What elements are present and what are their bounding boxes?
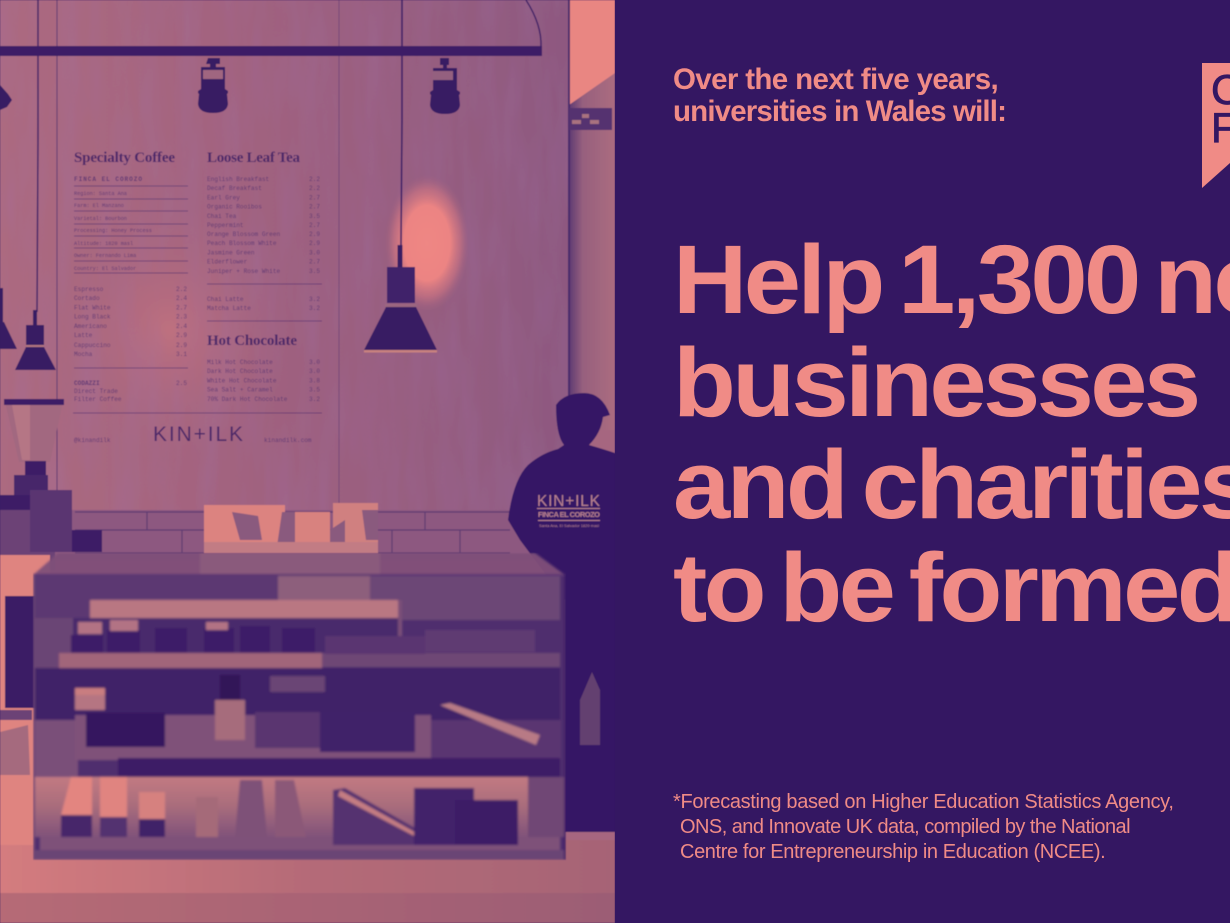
menu board text: Cappuccino xyxy=(74,342,111,349)
menu board text: 2.9 xyxy=(309,240,320,247)
menu board text: 3.8 xyxy=(309,378,320,384)
main headline xyxy=(673,225,1230,642)
menu board text: 3.0 xyxy=(309,250,320,256)
menu board text: 2.7 xyxy=(309,222,320,229)
barista with branded t-shirt: KIN+ILK xyxy=(537,493,601,510)
menu board text: Cortado xyxy=(74,295,100,302)
menu board text: Decaf Breakfast xyxy=(207,185,262,192)
menu board text: 2.2 xyxy=(309,185,320,192)
menu board text: Juniper + Rose White xyxy=(207,268,280,275)
menu board text: Peach Blossom White xyxy=(207,240,277,247)
menu board text: Chai Latte xyxy=(207,296,244,303)
menu board text: Flat White xyxy=(74,304,111,312)
barista with branded t-shirt: Santa Ana, El Salvador 1820 masl xyxy=(539,523,599,528)
coffee bags xyxy=(204,503,378,553)
logo: ribbon badge cropped at right edge xyxy=(1202,63,1230,188)
menu board text: 70% Dark Hot Chocolate xyxy=(207,396,288,403)
menu board text: KIN+ILK xyxy=(153,423,243,446)
menu board text: Altitude: 1820 masl xyxy=(74,241,133,247)
menu board text: 3.1 xyxy=(176,351,187,358)
loaves on bottom shelf xyxy=(61,777,518,845)
counter top xyxy=(0,555,615,923)
menu board text: Long Black xyxy=(74,314,111,320)
menu board text: Latte xyxy=(74,332,93,339)
menu board text: 3.2 xyxy=(309,305,320,312)
menu board text: Specialty Coffee xyxy=(74,150,175,166)
intro heading: Over the next five years, xyxy=(673,63,998,96)
menu board text: Owner: Fernando Lima xyxy=(74,253,136,259)
menu board text: 2.7 xyxy=(309,194,320,202)
tiled wall xyxy=(0,490,569,570)
menu board text: 3.5 xyxy=(309,386,320,394)
menu board text: 3.5 xyxy=(309,268,320,275)
menu board text: Varietal: Bourbon xyxy=(74,216,127,222)
barista with branded t-shirt xyxy=(508,393,615,832)
menu board text: 2.7 xyxy=(176,304,187,312)
menu board text: White Hot Chocolate xyxy=(207,378,277,384)
pendant lamps xyxy=(0,245,437,370)
pastries on top shelf xyxy=(71,626,535,654)
menu board text: Loose Leaf Tea xyxy=(207,150,300,166)
footnote: Centre for Entrepreneurship in Education (NCEE). xyxy=(680,841,1105,863)
menu board text: 2.9 xyxy=(176,342,187,349)
track and cables xyxy=(0,0,542,312)
menu board text: 2.2 xyxy=(309,176,320,183)
background wall xyxy=(0,0,615,923)
menu board text: 2.9 xyxy=(176,332,187,339)
menu board text: Espresso xyxy=(74,286,104,293)
menu board text: 3.0 xyxy=(309,359,320,366)
wall socket xyxy=(569,108,612,130)
panel: statement on purple background xyxy=(615,0,1230,923)
menu board text: 2.4 xyxy=(176,295,187,302)
menu board text: English Breakfast xyxy=(207,176,270,183)
menu board text: CODAZZI xyxy=(74,380,100,387)
glass display cabinet xyxy=(33,553,566,860)
menu board text: Country: El Salvador xyxy=(74,266,136,272)
menu board text: Americano xyxy=(74,323,107,330)
menu board text: Farm: El Manzano xyxy=(74,203,124,209)
footnote: ONS, and Innovate UK data, compiled by the National xyxy=(680,816,1130,838)
barista with branded t-shirt: FINCA EL COROZO xyxy=(538,510,600,519)
footnote xyxy=(673,791,1174,863)
menu board text: Region: Santa Ana xyxy=(74,191,127,197)
menu board text: Milk Hot Chocolate xyxy=(207,359,273,366)
menu board text: Elderflower xyxy=(207,258,248,266)
menu board text: 3.2 xyxy=(309,396,320,403)
main headline: businesses xyxy=(673,328,1198,436)
menu board text xyxy=(73,150,322,446)
menu board text: Hot Chocolate xyxy=(207,333,297,349)
menu board text: 3.2 xyxy=(309,296,320,303)
panel: duotone cafe photo xyxy=(0,0,615,923)
menu board text: kinandilk.com xyxy=(264,437,312,444)
menu board text: 2.9 xyxy=(309,231,320,238)
menu board text: Processing: Honey Process xyxy=(74,228,152,234)
menu board text: 2.7 xyxy=(309,204,320,210)
menu board text: @kinandilk xyxy=(74,437,111,444)
intro heading xyxy=(673,63,1006,128)
menu board text: Mocha xyxy=(74,351,93,358)
menu board text: Jasmine Green xyxy=(207,250,255,256)
menu board text: Peppermint xyxy=(207,222,244,229)
menu board text: Matcha Latte xyxy=(207,305,251,312)
menu board text: Chai Tea xyxy=(207,213,237,220)
menu board text: 2.2 xyxy=(176,286,187,293)
menu board text: 3.0 xyxy=(309,368,320,375)
menu board text: 2.5 xyxy=(176,380,187,387)
menu board text: 2.3 xyxy=(176,314,187,320)
menu board text: 3.5 xyxy=(309,213,320,220)
menu board text: 2.7 xyxy=(309,258,320,266)
menu board text: Dark Hot Chocolate xyxy=(207,368,273,375)
menu board text: Earl Grey xyxy=(207,194,240,202)
menu board text: Filter Coffee xyxy=(74,396,122,403)
menu board text: Orange Blossom Green xyxy=(207,231,280,238)
coffee grinder xyxy=(0,399,64,520)
menu board text: Direct Trade xyxy=(74,388,118,395)
pastries on middle shelf xyxy=(75,675,540,752)
plywood menu board xyxy=(0,0,570,510)
intro heading: universities in Wales will: xyxy=(673,95,1006,128)
menu board text: Organic Rooibos xyxy=(207,204,262,210)
menu board text: Sea Salt + Caramel xyxy=(207,386,273,394)
footnote: *Forecasting based on Higher Education Statistics Agency, xyxy=(673,791,1174,813)
menu board text: 2.4 xyxy=(176,323,187,330)
menu board text: FINCA EL COROZO xyxy=(74,176,142,183)
cake slices, upper tops xyxy=(78,620,228,634)
spotlights xyxy=(0,58,460,114)
